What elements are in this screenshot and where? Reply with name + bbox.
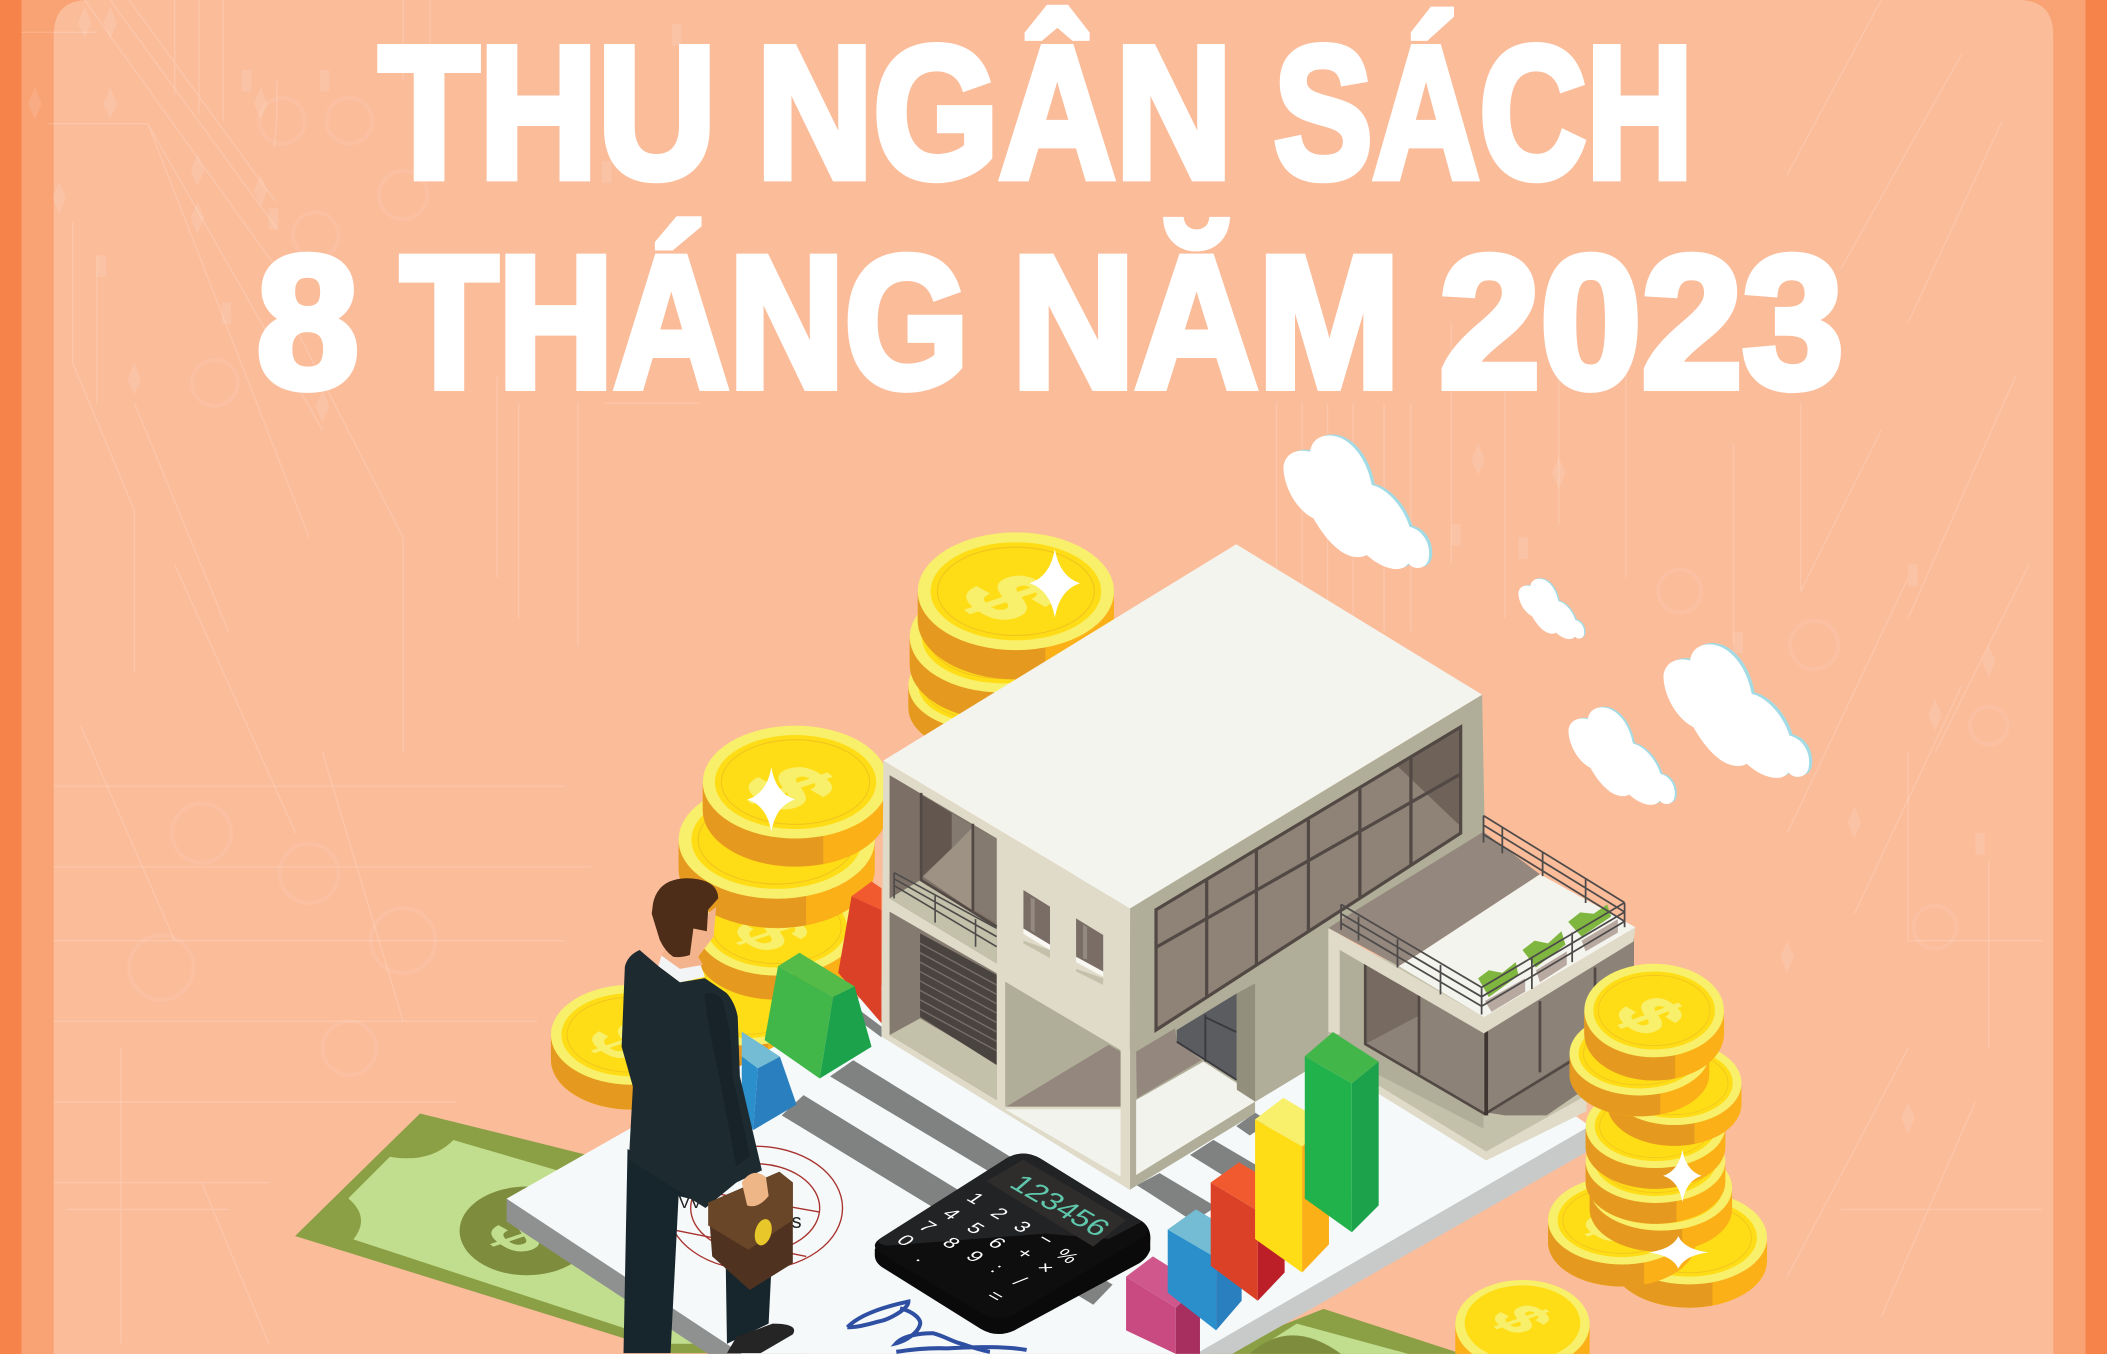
man: far leg: [726, 1243, 773, 1344]
red stamp seal: [668, 1146, 843, 1270]
circuit background nodes: [28, 7, 1995, 1134]
man: near leg: [624, 1149, 705, 1353]
bar: red: [1211, 1162, 1285, 1301]
cloud 2: [1518, 578, 1586, 639]
cloud 4: [1663, 643, 1812, 778]
calculator: 1: [961, 1190, 989, 1208]
man: shoe: [727, 1324, 794, 1353]
coin stack left: $: [717, 755, 863, 821]
annex glass: [1365, 937, 1634, 1115]
man: hair: [652, 878, 718, 957]
man: neck and face: [661, 907, 716, 969]
calculator: 5: [961, 1220, 989, 1237]
building: corner pillar: [1121, 1043, 1130, 1190]
side frame overlay left: [0, 0, 22, 1354]
side frame overlay right: [2086, 0, 2107, 1354]
title: SÁCH: [1274, 7, 1693, 217]
calculator: %: [1050, 1246, 1083, 1267]
building: shutter door: [920, 933, 997, 1065]
title: 8: [257, 217, 359, 427]
red stamp seal: VV: [679, 1192, 702, 1212]
coin stack left: $: [564, 1010, 691, 1069]
calculator: 7: [913, 1218, 941, 1236]
calculator: 6: [983, 1234, 1010, 1252]
building: left facade: [882, 761, 1130, 1190]
planter: green shrubs: [1478, 904, 1618, 1012]
annex railing: [1341, 816, 1625, 1015]
businessman: [622, 878, 794, 1353]
building: right facade: [1129, 695, 1485, 1190]
coin stack behind building: [908, 532, 1114, 753]
man: hand: [742, 1173, 769, 1206]
title: [257, 7, 1844, 427]
cloud 1: [1283, 434, 1432, 569]
coin stack right: [1548, 964, 1767, 1308]
annex roof terrace: [1328, 832, 1540, 966]
signature: [847, 1302, 1027, 1352]
building: door side column: [1237, 983, 1255, 1102]
calculator: [875, 1154, 1150, 1334]
banknote left: [295, 1113, 806, 1353]
building: entrance door: [1177, 993, 1237, 1080]
building: small window left: [1023, 890, 1050, 958]
calculator: /: [1008, 1274, 1031, 1289]
calculator: 2: [985, 1205, 1013, 1223]
man: suit jacket: [622, 950, 762, 1208]
title: 2023: [1439, 217, 1844, 427]
red stamp seal: s: [791, 1211, 802, 1233]
document plate: [507, 822, 1590, 1354]
calculator: :: [985, 1261, 1008, 1276]
banknote right: [1209, 1309, 1462, 1354]
building: annex base: [1328, 941, 1587, 1152]
title: THU: [379, 7, 716, 217]
building: roof: [883, 544, 1482, 908]
bar: blue back: [742, 1032, 797, 1130]
gray stripes on document: [782, 1011, 1270, 1305]
man: jacket sleeve highlight: [704, 993, 750, 1166]
building: upper left recess: [890, 775, 997, 963]
calculator: 8: [937, 1234, 965, 1252]
building: entrance interior: [1136, 1028, 1202, 1098]
calculator: 123456: [1003, 1170, 1116, 1242]
bar: red back: [838, 882, 882, 1023]
coin bottom: [1455, 1280, 1590, 1354]
banknote left: $: [462, 1205, 591, 1262]
annex roof rim: [1328, 927, 1635, 1033]
building: annex base trim: [1379, 1086, 1587, 1160]
building: upper window: [921, 793, 997, 927]
bar: yellow: [1255, 1098, 1329, 1273]
annex left wall: [1328, 929, 1484, 1129]
coin stack behind building: $: [933, 563, 1087, 632]
calculator: 4: [937, 1205, 965, 1223]
building: lower left recess: [890, 912, 997, 1100]
bar: pink: [1126, 1256, 1200, 1354]
building: big window: [1156, 727, 1461, 1030]
building: small window right: [1076, 918, 1103, 985]
calculator: =: [981, 1287, 1009, 1305]
cloud 3: [1568, 707, 1677, 805]
building: balcony railing: [894, 873, 997, 947]
calculator: 0: [891, 1232, 919, 1250]
title: NĂM: [1012, 217, 1400, 427]
title: THÁNG: [400, 217, 969, 427]
calculator: +: [1010, 1245, 1039, 1263]
bar: blue: [1168, 1209, 1242, 1330]
calculator: −: [1031, 1231, 1059, 1249]
coin stack right: $: [1560, 1199, 1676, 1251]
bar: green back: [765, 953, 872, 1079]
coin bottom: $: [1474, 1298, 1569, 1340]
bar: green: [1305, 1032, 1379, 1232]
title: NGÂN: [757, 7, 1232, 217]
calculator: 3: [1008, 1218, 1036, 1236]
building: ground floor terrace: [1136, 1062, 1255, 1175]
man: briefcase: [708, 1172, 793, 1290]
calculator: 9: [961, 1248, 988, 1266]
calculator: .: [911, 1250, 933, 1265]
calculator: ×: [1031, 1259, 1059, 1277]
building: open ground floor: [1005, 982, 1121, 1107]
building: [882, 544, 1635, 1190]
coin stack right: $: [1595, 988, 1704, 1043]
man: shirt collar: [658, 955, 705, 982]
coin stack left: $: [709, 904, 834, 961]
coin stack left: [551, 726, 888, 1110]
